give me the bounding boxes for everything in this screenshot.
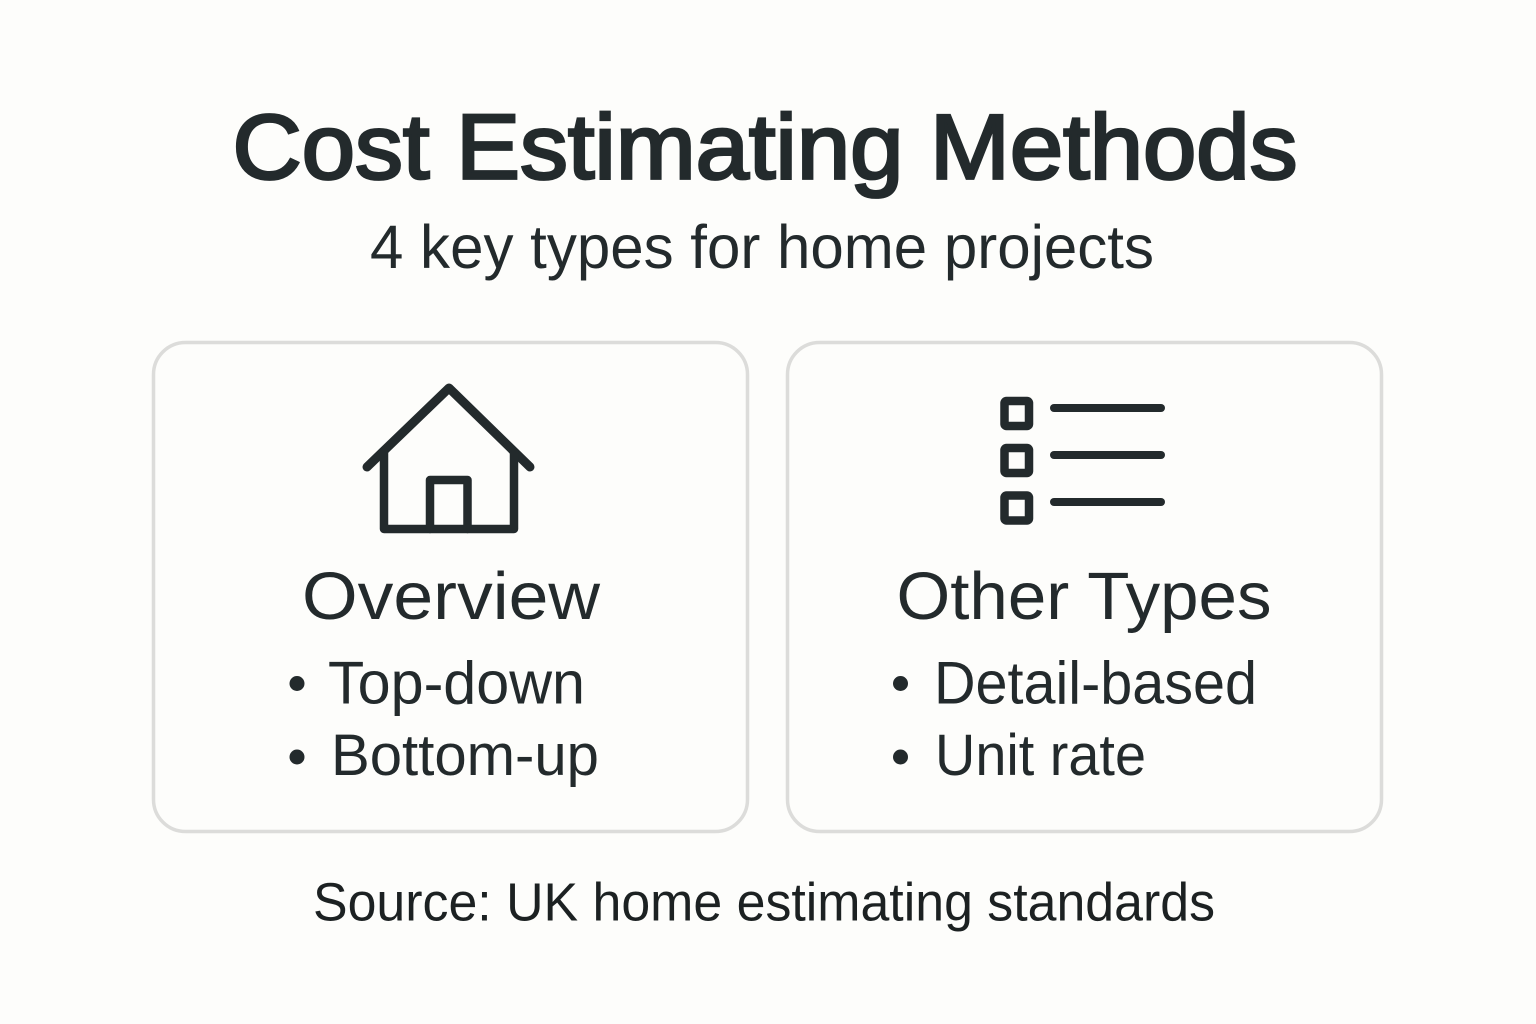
list: overview items: [290, 650, 599, 788]
title: Cost Estimating Methods: [232, 96, 1298, 198]
list: overview items: Top-down: [328, 650, 585, 716]
icon: house: [367, 388, 530, 529]
icon: checklist: [1004, 401, 1161, 520]
source note: Source: UK home estimating standards: [313, 872, 1215, 932]
list: other types items: Unit rate: [935, 723, 1146, 788]
heading: overview: Overview: [302, 559, 601, 634]
heading: other types: Other Types: [896, 559, 1272, 634]
list: overview items: Bottom-up: [331, 723, 599, 788]
panel: other types: [788, 342, 1382, 832]
subtitle: 4 key types for home projects: [370, 213, 1154, 281]
list: other types items: [893, 650, 1257, 788]
panel: overview: [154, 342, 748, 832]
list: other types items: Detail-based: [934, 650, 1257, 716]
